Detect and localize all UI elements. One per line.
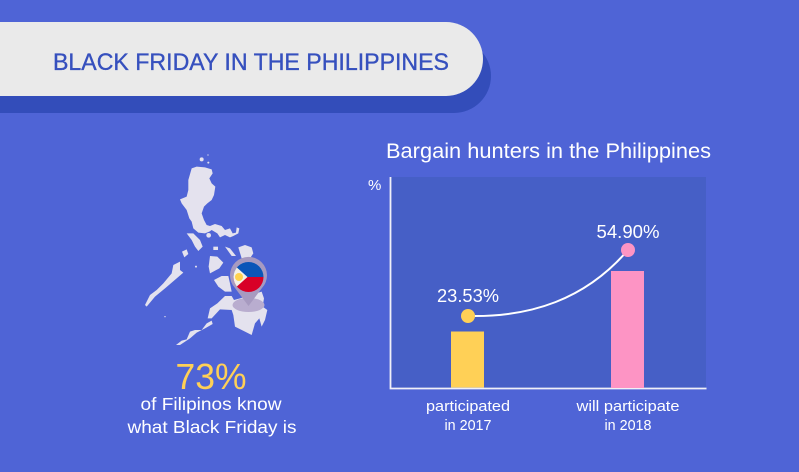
infographic canvas — [0, 22, 710, 436]
map of the Philippines with pin — [145, 154, 267, 345]
bar: 2017 — [451, 332, 484, 388]
label 2018 — [575, 398, 680, 434]
label 2017: participated — [426, 398, 510, 415]
bar: 2018 — [611, 271, 644, 388]
label 2017 — [426, 398, 510, 434]
y-axis unit: % — [368, 177, 381, 194]
trend curve — [470, 250, 628, 316]
label 2018: will participate — [575, 398, 680, 415]
title: BLACK FRIDAY IN THE PHILIPPINES — [53, 49, 449, 76]
location pin shadow — [232, 298, 264, 312]
bar chart — [368, 177, 706, 388]
flag of the Philippines — [233, 262, 264, 292]
marker 2018 — [621, 243, 635, 257]
map islands — [145, 154, 267, 345]
title banner — [0, 22, 491, 113]
label 2018: in 2018 — [604, 417, 652, 434]
value 2018: 54.90% — [596, 222, 660, 242]
statistic caption: what Black Friday is — [126, 417, 297, 437]
value 2017: 23.53% — [437, 286, 499, 306]
marker 2017 — [461, 309, 475, 323]
statistic caption — [126, 394, 297, 437]
statistic caption: of Filipinos know — [140, 394, 282, 414]
location pin — [230, 257, 267, 306]
statistic: 73%: 73% — [176, 356, 246, 397]
label 2017: in 2017 — [444, 417, 492, 434]
chart heading: Bargain hunters in the Philippines — [386, 140, 711, 163]
